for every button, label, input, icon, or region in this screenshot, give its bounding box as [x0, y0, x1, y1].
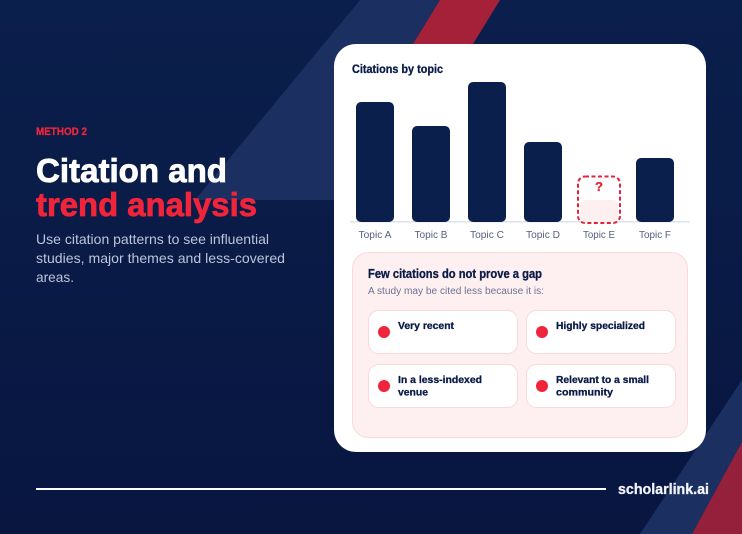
reason: less-indexed venue: In a less-indexed — [398, 374, 482, 386]
description text: studies, major themes and less-covered — [36, 250, 285, 266]
background shape: lower navy diagonal — [640, 380, 742, 534]
title: Citation and — [36, 152, 227, 189]
reason: highly specialized — [526, 310, 676, 354]
panel: few citations callout — [352, 252, 688, 438]
panel: white card — [334, 44, 706, 452]
bar chart: Topic A — [358, 230, 392, 241]
bar chart: Topic D — [526, 230, 560, 241]
reason: very recent — [368, 310, 518, 354]
background shape: lower red diagonal — [692, 442, 742, 534]
reason: less-indexed venue: venue — [398, 386, 428, 398]
description text — [36, 231, 285, 285]
chart heading: Citations by topic — [352, 64, 444, 76]
title — [36, 152, 257, 223]
brand: scholarlink.ai: scholarlink.ai — [618, 481, 709, 498]
bar chart: Topic C — [470, 230, 504, 241]
reason: highly specialized: Highly specialized — [556, 320, 645, 332]
callout subtitle: A study may be cited less because it is: — [368, 286, 544, 297]
background shape: upper red diagonal — [413, 0, 500, 44]
title: trend analysis — [36, 186, 257, 223]
bar chart: Topic B — [414, 230, 448, 241]
reason: small community: Relevant to a small — [556, 374, 649, 386]
bar chart: ? — [595, 179, 603, 194]
bar chart — [350, 82, 690, 241]
bar chart: Topic E — [583, 230, 615, 241]
eyebrow: method 2: METHOD 2 — [36, 126, 87, 138]
reason: very recent: Very recent — [398, 320, 454, 332]
reason: small community — [526, 364, 676, 408]
bar chart: Topic F — [639, 230, 671, 241]
reason: less-indexed venue — [368, 364, 518, 408]
reason: small community: community — [556, 386, 613, 398]
description text: Use citation patterns to see influential — [36, 231, 269, 247]
description text: areas. — [36, 269, 74, 285]
callout heading: Few citations do not prove a gap — [368, 267, 542, 281]
background shape: upper navy diagonal — [195, 0, 440, 200]
